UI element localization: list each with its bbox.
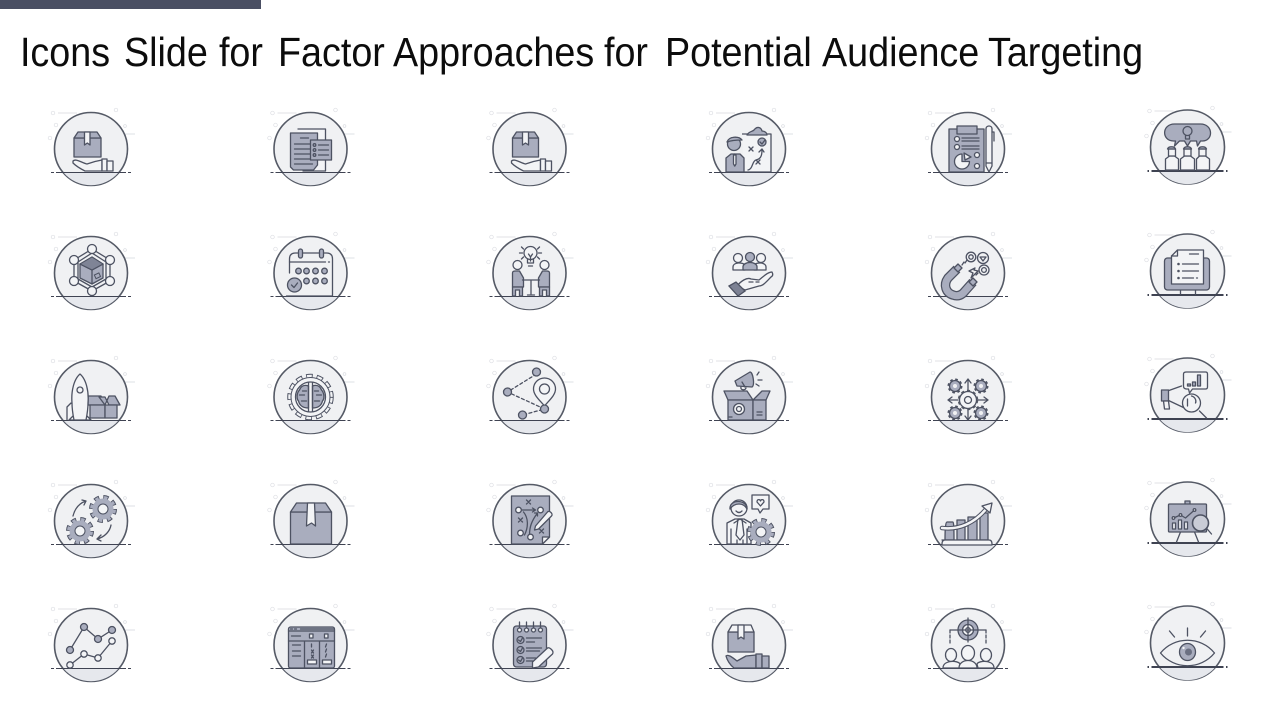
icon: gears with directional arrows	[925, 356, 1012, 434]
title: Icons	[20, 30, 110, 75]
icon: megaphone over open box	[706, 356, 793, 434]
icon: comparison table window	[268, 604, 354, 682]
title: for	[604, 30, 648, 75]
icon: closed package box	[268, 480, 354, 558]
icon: documents with checklist	[268, 108, 354, 186]
icon: strategist with tactic clipboard	[706, 108, 793, 186]
icon: two people meeting with idea bulb	[487, 232, 574, 310]
icon: double line chart	[48, 604, 135, 682]
icon: audience on supporting hand	[706, 232, 793, 310]
icon: support agent with heart bubble and gear	[706, 480, 793, 558]
title: Targeting	[988, 30, 1143, 75]
icon: box on open hand	[48, 108, 135, 186]
icon: box above filled hand	[706, 604, 793, 682]
icon: notepad checklist with pencil	[487, 604, 574, 682]
icon: tactic plan sheet with pencil	[487, 480, 574, 558]
title: for	[219, 30, 263, 75]
icon: clipboard report with pie chart and pen	[925, 108, 1012, 186]
icon: megaphone, chart bubble and magnifier	[1145, 354, 1232, 432]
top accent bar	[0, 0, 261, 9]
title: Factor	[278, 30, 385, 75]
icon: box on open hand, variant	[487, 108, 574, 186]
icon: eye with rays	[1145, 602, 1232, 680]
icon: brain inside gear	[268, 356, 354, 434]
icon: rocket launch with boxes	[48, 356, 135, 434]
icon: gears with cycle arrows	[48, 480, 135, 558]
icon: monitor with checklist document	[1145, 230, 1232, 308]
icon: team sharing an idea	[1145, 106, 1232, 184]
icon: presentation board with magnifier	[1145, 478, 1232, 556]
icon: rising bar chart with arrow	[925, 480, 1012, 558]
icon: magnet attracting hearts	[925, 232, 1012, 310]
title: Slide	[124, 30, 208, 75]
icon: route with location pin	[487, 356, 574, 434]
icon: calendar with check badge	[268, 232, 354, 310]
title: Approaches	[393, 30, 594, 75]
icon: box in hexagon network	[48, 232, 135, 310]
title: Potential	[665, 30, 812, 75]
title: Audience	[822, 30, 979, 75]
icon: target above audience group	[925, 604, 1012, 682]
